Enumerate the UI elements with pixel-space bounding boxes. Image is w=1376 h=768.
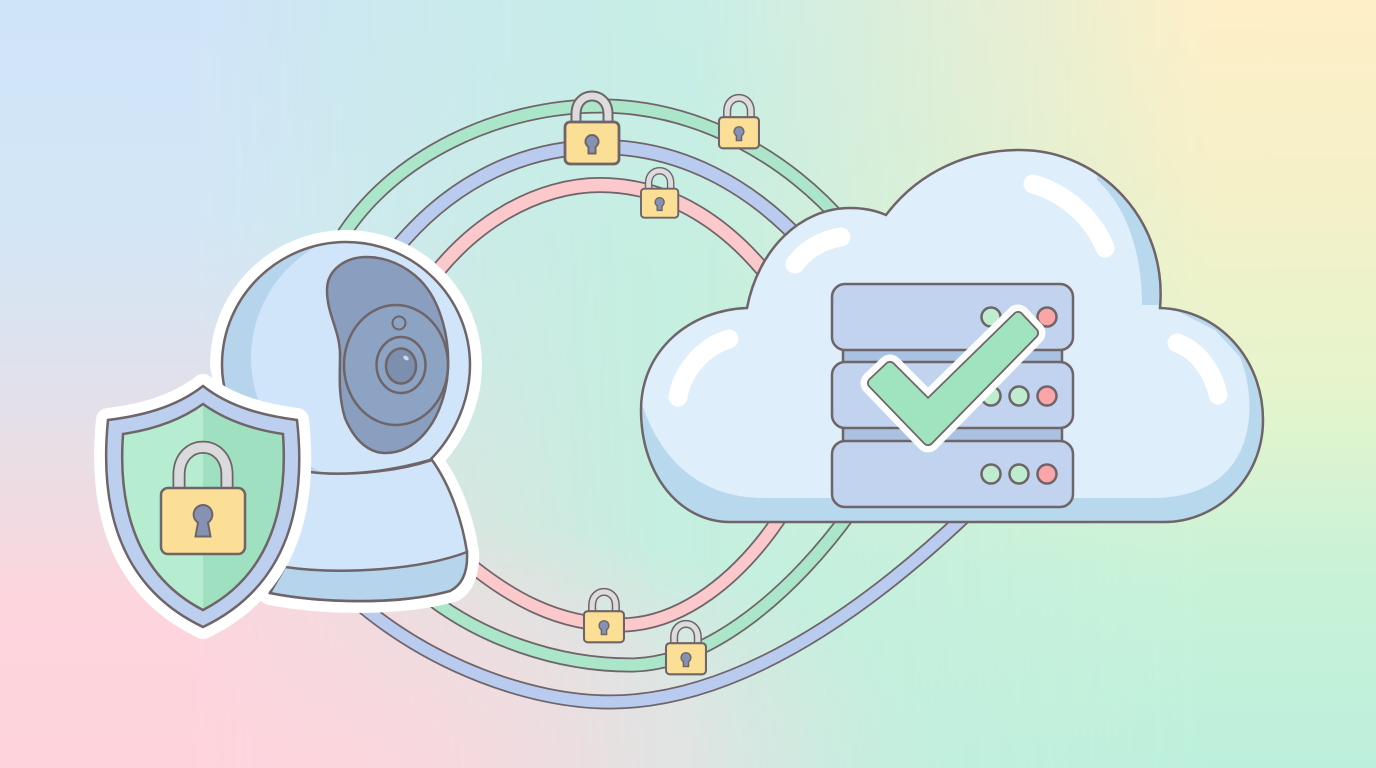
shield right face — [203, 404, 284, 610]
infographic illustration — [94, 90, 1264, 710]
ring: outer green bottom — [420, 510, 852, 665]
cloud outline — [641, 150, 1263, 522]
server connectors — [843, 348, 1062, 364]
padlock: inner top — [641, 171, 678, 218]
checkmark — [873, 317, 1033, 440]
camera head light face — [251, 243, 469, 472]
camera head outline — [222, 242, 470, 474]
background right wash — [776, 0, 1376, 574]
padlock: bottom right — [666, 624, 706, 674]
cloud — [640, 148, 1264, 524]
camera dark face — [327, 257, 448, 453]
background left wash — [0, 0, 567, 768]
connection rings — [340, 106, 966, 702]
server unit 1 — [832, 284, 1073, 350]
padlock: top right — [719, 98, 759, 148]
server unit 3 — [832, 441, 1073, 507]
camera head — [222, 242, 470, 474]
ring: inner pink top — [420, 185, 775, 295]
server unit 2 — [832, 362, 1073, 428]
camera base lip — [270, 552, 467, 601]
camera sticker border — [222, 242, 470, 601]
cloud body — [641, 150, 1263, 522]
ring: inner pink bottom — [455, 510, 785, 625]
shield frame — [106, 386, 299, 627]
shield inner outline — [122, 404, 284, 610]
camera — [222, 228, 519, 601]
cloud light face — [642, 151, 1250, 498]
camera lens housing — [344, 305, 448, 425]
padlock: top large — [565, 96, 619, 164]
camera lens — [376, 337, 426, 393]
shield sticker border — [106, 386, 299, 627]
camera sensor dot — [392, 316, 406, 330]
server stack — [832, 284, 1073, 507]
ring: middle blue bottom — [355, 515, 966, 702]
shield padlock — [161, 447, 245, 554]
shield left face — [122, 404, 203, 610]
shield — [106, 386, 299, 627]
cloud highlights — [678, 184, 1218, 397]
ring: middle blue top — [380, 147, 805, 270]
padlock: bottom centre — [584, 592, 624, 642]
ring: outer green top — [340, 106, 845, 240]
camera base — [270, 460, 467, 601]
